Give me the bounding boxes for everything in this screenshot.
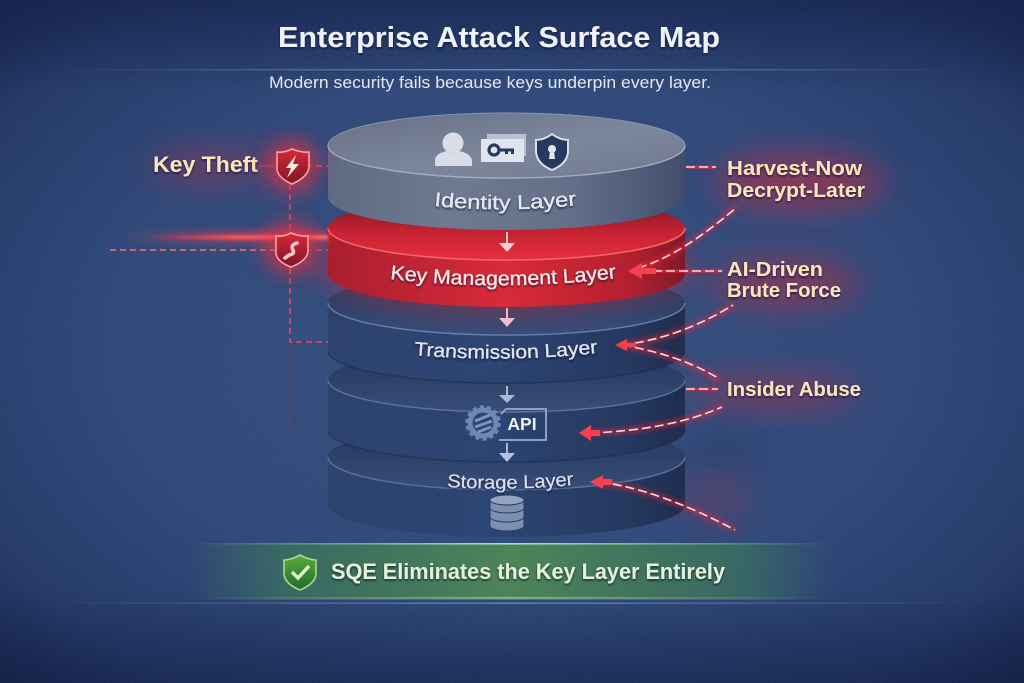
stack: layered cylinders [316, 113, 696, 537]
label: AI-driven brute force: Brute Force [727, 279, 841, 302]
title: Enterprise Attack Surface Map [278, 22, 720, 54]
icon: gear [467, 407, 499, 439]
text: identity layer: Identity Layer [434, 192, 577, 216]
icon: broken link shield [265, 222, 317, 274]
label: AI-driven brute force: AI-Driven [727, 258, 823, 281]
icon: key card [481, 134, 526, 162]
icon: keyhole shield [536, 134, 568, 170]
label: harvest-now decrypt-later [727, 157, 865, 202]
label: key theft: Key Theft [153, 152, 259, 177]
icon: person [435, 132, 472, 166]
icon: database [490, 495, 524, 531]
arrow heads [579, 263, 656, 489]
label: harvest-now decrypt-later: Decrypt-Later [727, 179, 865, 202]
straight glow strokes [640, 167, 722, 389]
icon: lightning shield [266, 140, 318, 192]
label: insider abuse: Insider Abuse [727, 378, 861, 401]
layer: storage [328, 424, 685, 537]
layer: key management [316, 196, 696, 314]
label: AI-driven brute force [727, 258, 841, 302]
layer: identity [328, 113, 685, 230]
red beam [120, 232, 328, 242]
label: harvest-now decrypt-later: Harvest-Now [727, 157, 862, 180]
arrows between layers [499, 232, 515, 462]
icon: API box [499, 409, 546, 440]
attack arrows right [590, 167, 737, 530]
red glow strokes [590, 207, 736, 530]
layer: API [328, 348, 685, 462]
text: storage layer: Storage Layer [448, 474, 574, 495]
banner [40, 543, 984, 604]
text: transmission layer: Transmission Layer [414, 342, 597, 362]
subtitle: Modern security fails because keys underpin every layer. [269, 74, 711, 92]
icon: API box: API [507, 414, 537, 434]
text: key management layer: Key Management Layer [390, 265, 616, 292]
left connector lines [110, 166, 328, 430]
dashed strokes [590, 167, 737, 530]
banner text: SQE Eliminates the Key Layer Entirely [331, 559, 726, 584]
layer: transmission [328, 271, 685, 383]
icon: green check shield [284, 555, 316, 590]
red glow behind attack labels [150, 150, 885, 519]
